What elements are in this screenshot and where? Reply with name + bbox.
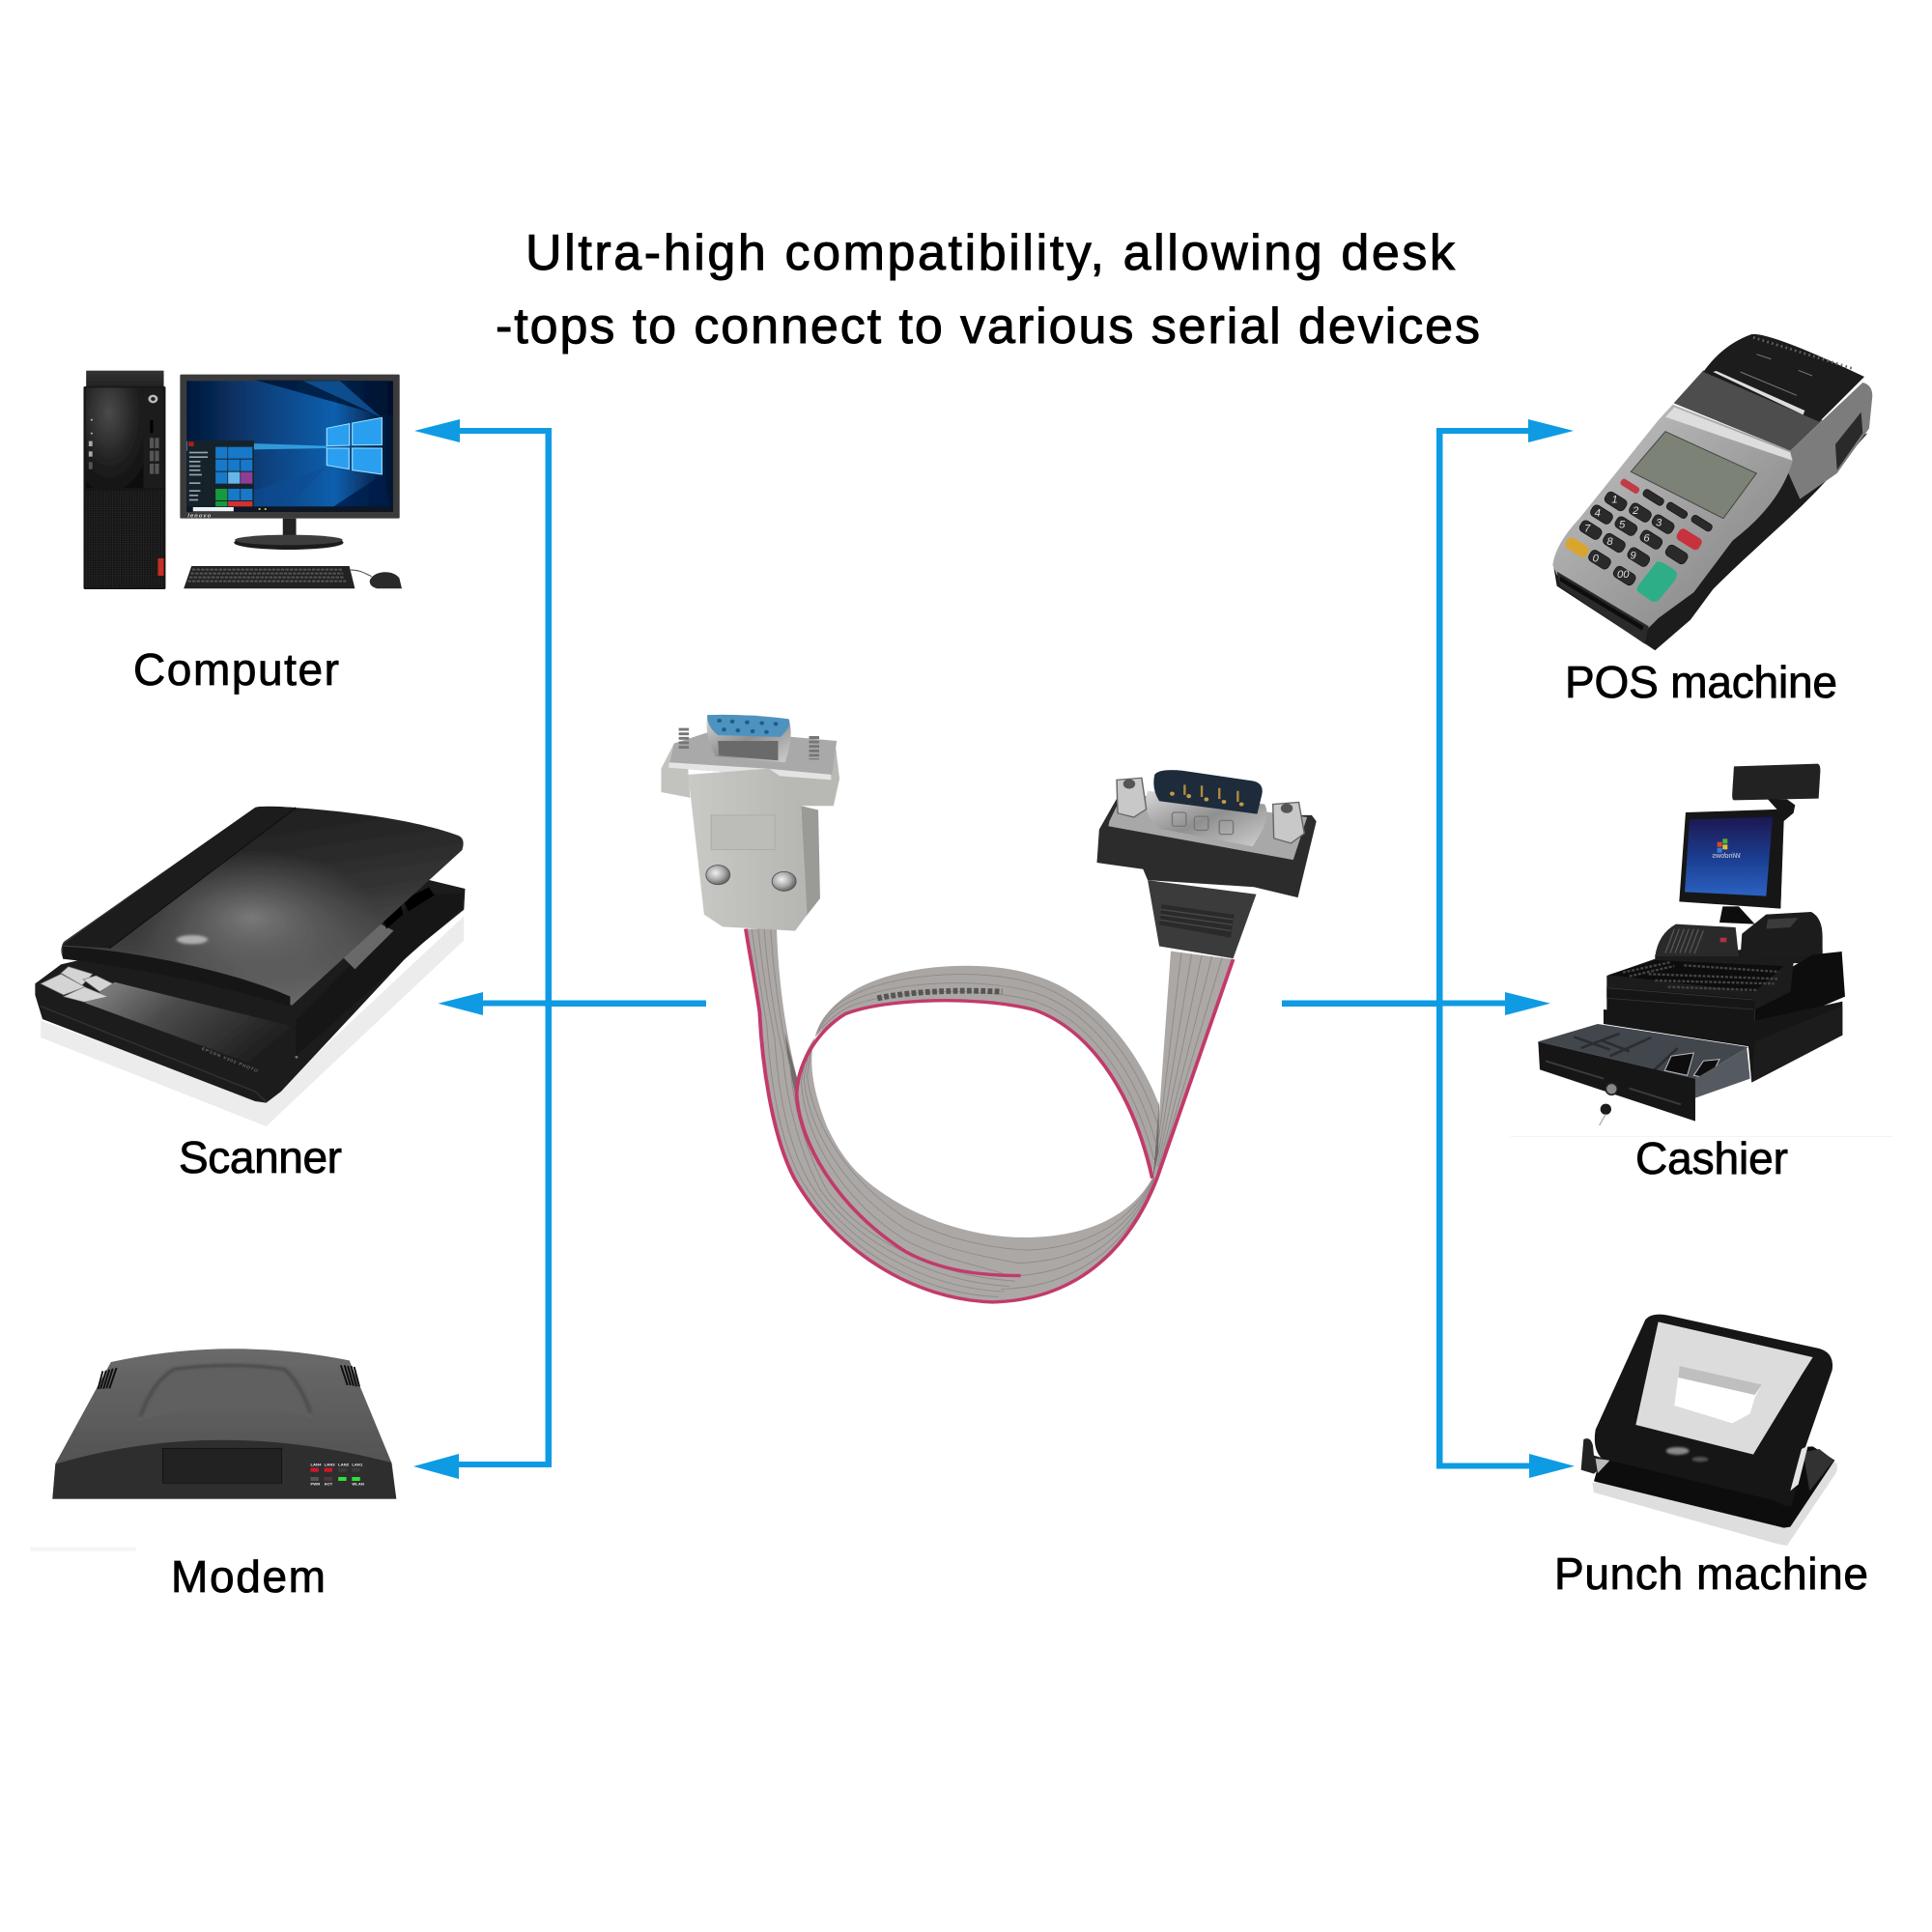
tower (83, 371, 165, 589)
POS keypad: 6 (1643, 533, 1650, 545)
cash drawer (1538, 1024, 1750, 1125)
POS keypad (1564, 478, 1714, 602)
ribbon cable (746, 929, 1234, 1302)
modem LEDs: LAN3 (325, 1463, 335, 1467)
POS body (1552, 383, 1872, 644)
icon: hole punch (1581, 1315, 1837, 1546)
label: Scanner: Scanner (179, 1132, 342, 1182)
icon: cash register (1510, 764, 1893, 1137)
title: -tops to connect to various serial devices (496, 298, 1480, 355)
customer pole display (1732, 764, 1820, 908)
icon: modem (30, 1349, 396, 1551)
scanner buttons (41, 967, 113, 1002)
register monitor: Windows (1712, 851, 1741, 860)
icon: desktop computer (83, 371, 402, 589)
POS screen (1631, 432, 1756, 519)
ribbon: red edge (746, 929, 1234, 1302)
right connector lines and arrows (1282, 419, 1575, 1478)
label: Punch machine: Punch machine (1554, 1548, 1868, 1599)
modem LEDs: LAN2 (338, 1463, 350, 1467)
POS keypad: 3 (1656, 518, 1662, 529)
label: Computer: Computer (133, 644, 339, 695)
title: Ultra-high compatibility, allowing desk (526, 225, 1456, 281)
modem LEDs: PWR (310, 1482, 320, 1487)
monitor: lenovo (187, 514, 212, 519)
modem LEDs: LAN1 (352, 1463, 363, 1467)
connector: male DB9 with black hood (1096, 770, 1317, 958)
punch lever (1595, 1315, 1833, 1506)
illustration: serial cable with DB9 connectors (661, 715, 1317, 1302)
modem LEDs: LAN4 (310, 1463, 322, 1467)
left connector lines and arrows (413, 419, 706, 1479)
scanner base: EPSON V300 PHOTO (201, 1046, 259, 1073)
POS keypad: 5 (1619, 520, 1626, 531)
scanner lid (61, 807, 464, 1007)
arrow: trunk out of cable (545, 1001, 706, 1007)
POS keypad: 7 (1584, 524, 1591, 535)
arrow: to computer (413, 419, 552, 1479)
POS keypad: 9 (1630, 551, 1636, 562)
drawer housing (1604, 1002, 1842, 1083)
label: Cashier: Cashier (1635, 1133, 1788, 1183)
register monitor (1679, 810, 1784, 924)
label: POS machine: POS machine (1565, 657, 1837, 707)
keyboard (184, 566, 355, 588)
monitor (180, 375, 400, 550)
title (496, 225, 1480, 355)
punch base (1592, 1446, 1837, 1546)
POS keypad: 0 (1593, 553, 1600, 564)
register keyboard (1606, 959, 1794, 1036)
icon: POS machine (1552, 334, 1872, 650)
POS keypad: 8 (1606, 536, 1613, 548)
icon: flatbed scanner (35, 807, 465, 1126)
POS printer (1674, 334, 1864, 451)
modem LEDs: WLAN (352, 1482, 364, 1487)
arrow: to POS machine (1436, 419, 1575, 1478)
POS keypad: 00 (1617, 569, 1630, 581)
POS keypad: 2 (1632, 505, 1639, 517)
modem LEDs (310, 1463, 364, 1487)
POS keypad: 1 (1611, 495, 1618, 506)
POS keypad: 4 (1595, 508, 1601, 520)
mouse (351, 570, 402, 588)
connector: female DB9 with grey hood (661, 715, 839, 931)
label: Modem: Modem (171, 1551, 326, 1602)
modem LEDs: ACT (325, 1482, 333, 1487)
scanner base (35, 879, 465, 1103)
ribbon: main crescent (746, 929, 1234, 1302)
ribbon: top loop (815, 966, 1159, 1179)
register printer and body (1655, 912, 1845, 1036)
punch latch (1581, 1438, 1610, 1474)
arrow: trunk out of cable (1282, 1001, 1442, 1007)
